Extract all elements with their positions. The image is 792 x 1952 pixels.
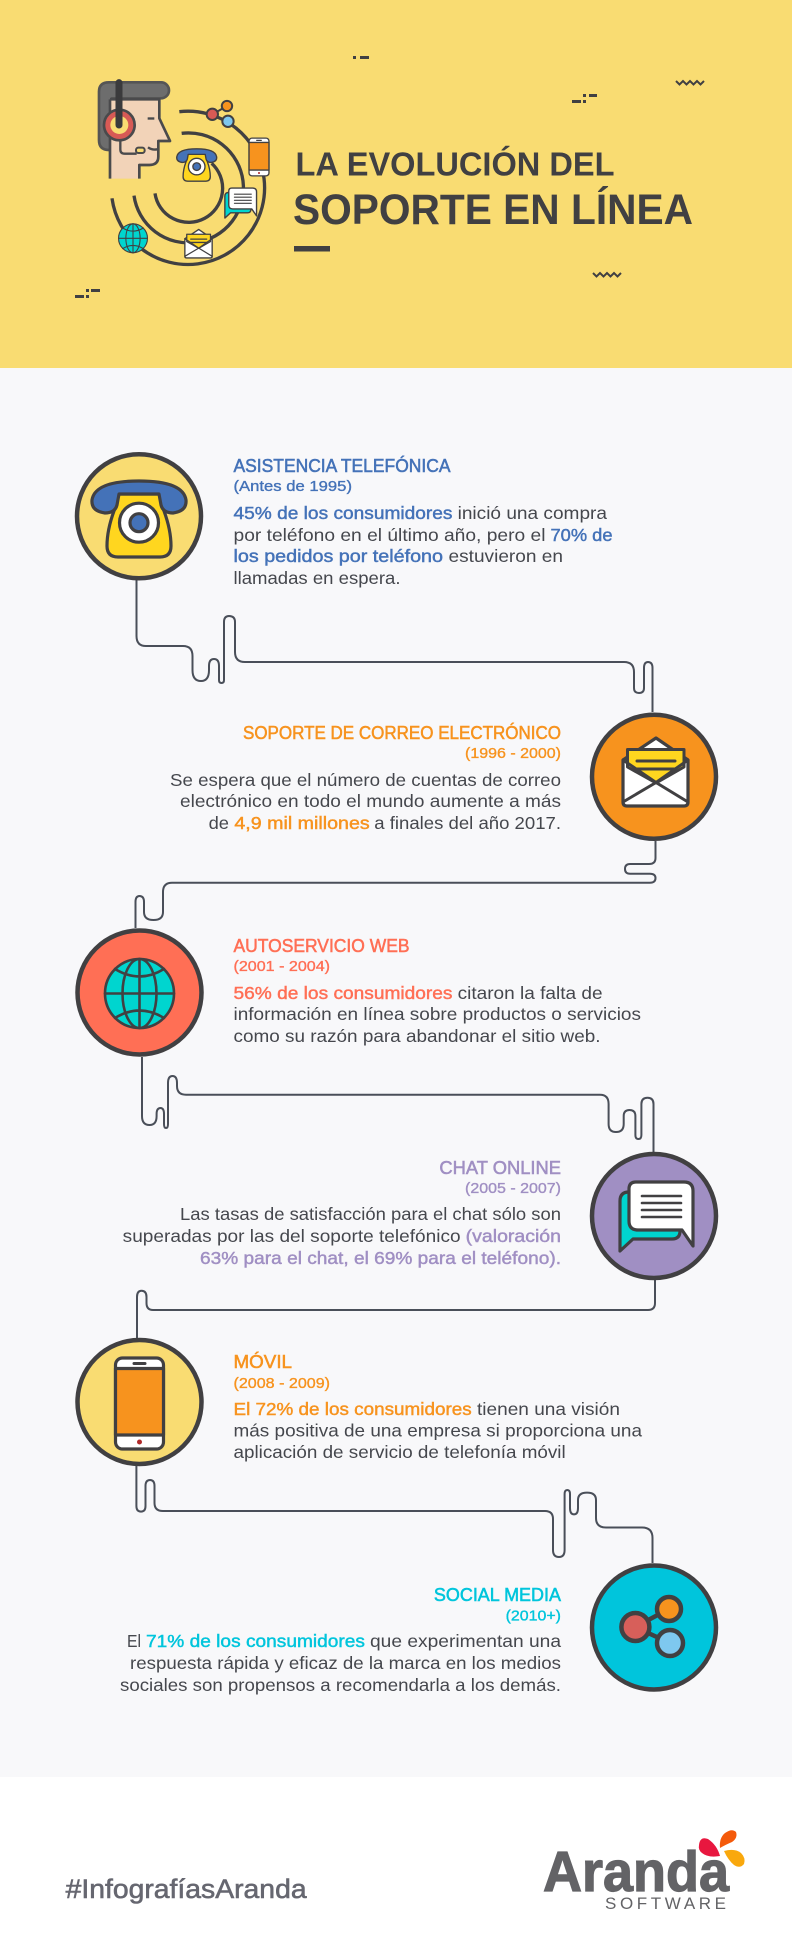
date: 2005-2007: (2005 - 2007) [465,1181,561,1197]
body text: respuesta rápida y eficaz de la marca en los medios [130,1653,561,1673]
body text [234,983,641,1046]
body text: 4,9 mil millones [234,813,370,833]
footer band [0,1777,792,1952]
connector 2 [136,841,656,928]
body text [234,503,612,588]
small envelope [185,229,212,258]
header title: SOPORTE EN LÍNEA [293,186,693,234]
heading: autoservicio web: AUTOSERVICIO WEB [234,935,410,956]
body text: como su razón para abandonar el sitio web. [234,1026,600,1046]
panel: asistencia telefónica [77,454,612,588]
body text [170,770,561,833]
body text: 45% de los consumidores [234,503,453,523]
small chat [225,188,257,218]
panel: chat online [123,1154,716,1278]
small mobile [249,138,269,176]
body text: electrónico en todo el mundo aumente a más [180,791,561,811]
body text: más positiva de una empresa si proporciona una [234,1421,642,1441]
body text: información en línea sobre productos o servicios [234,1004,641,1024]
small globe [119,224,147,253]
heading: asistencia telefónica: ASISTENCIA TELEFÓNICA [234,455,451,476]
icon: share nodes [592,1566,716,1690]
date: 1996-2000: (1996 - 2000) [465,746,561,762]
header band [0,0,792,368]
panel: móvil [78,1340,642,1464]
body text: inició una compra [458,503,607,523]
body text: (valoración [466,1226,561,1246]
header title [293,146,693,252]
icon: chat bubbles [592,1154,716,1278]
agent head [99,82,265,264]
body text [120,1631,561,1695]
body text: superadas por las del soporte telefónico [123,1226,461,1246]
body text [234,1399,642,1462]
panel: autoservicio web [78,930,641,1054]
connector 5 [136,1466,652,1563]
icon: envelope [592,715,716,839]
body text: 70% de [550,525,612,545]
header decorative marks [75,56,704,298]
body text: los pedidos por teléfono [234,546,443,566]
body text: sociales son propensos a recomendarla a los demás. [120,1675,561,1695]
body text: tienen una visión [477,1399,620,1419]
body text: estuvieron en [448,546,563,566]
logo: Aranda Software: Aranda [543,1840,730,1904]
small telephone [177,149,217,181]
panel: social media [120,1566,716,1695]
date: 2010+: (2010+) [506,1608,561,1624]
date: antes de 1995: (Antes de 1995) [234,479,352,495]
icon: mobile phone [78,1340,202,1464]
body text: Las tasas de satisfacción para el chat sólo son [180,1204,561,1224]
connector 3 [142,1057,654,1152]
body text: citaron la falta de [458,983,603,1003]
body text: 71% de los consumidores [146,1631,365,1651]
body text: llamadas en espera. [234,568,400,588]
heading: chat online: CHAT ONLINE [439,1157,561,1178]
icon: globe [78,930,202,1054]
body text: que experimentan una [370,1631,561,1651]
footer hashtag: #InfografíasAranda [66,1874,308,1904]
heading: correo electrónico: SOPORTE DE CORREO ELECTRÓNICO [243,722,561,743]
date: 2001-2004: (2001 - 2004) [234,959,330,975]
body text: 56% de los consumidores [234,983,453,1003]
body text: aplicación de servicio de telefonía móvil [234,1442,566,1462]
heading: móvil: MÓVIL [234,1351,292,1372]
header illustration: agent with support channels [99,82,269,264]
connector 4 [137,1280,655,1338]
body text: 63% para el chat, el 69% para el teléfono). [200,1248,561,1268]
panel: soporte de correo electrónico [170,715,716,839]
body text: por teléfono en el último año, pero el [234,525,546,545]
logo petals [699,1830,745,1867]
body text: de [209,813,229,833]
body text: Se espera que el número de cuentas de correo [170,770,561,790]
body text: El [127,1631,141,1651]
connector 1 [136,580,652,712]
body text: a finales del año 2017. [374,813,561,833]
logo: Aranda Software: SOFTWARE [605,1894,726,1913]
header title: LA EVOLUCIÓN DEL [296,146,614,182]
icon: telephone [77,454,201,578]
heading: social media: SOCIAL MEDIA [434,1584,562,1605]
body text: El 72% de los consumidores [234,1399,472,1419]
date: 2008-2009: (2008 - 2009) [234,1376,330,1392]
body text [123,1204,561,1268]
